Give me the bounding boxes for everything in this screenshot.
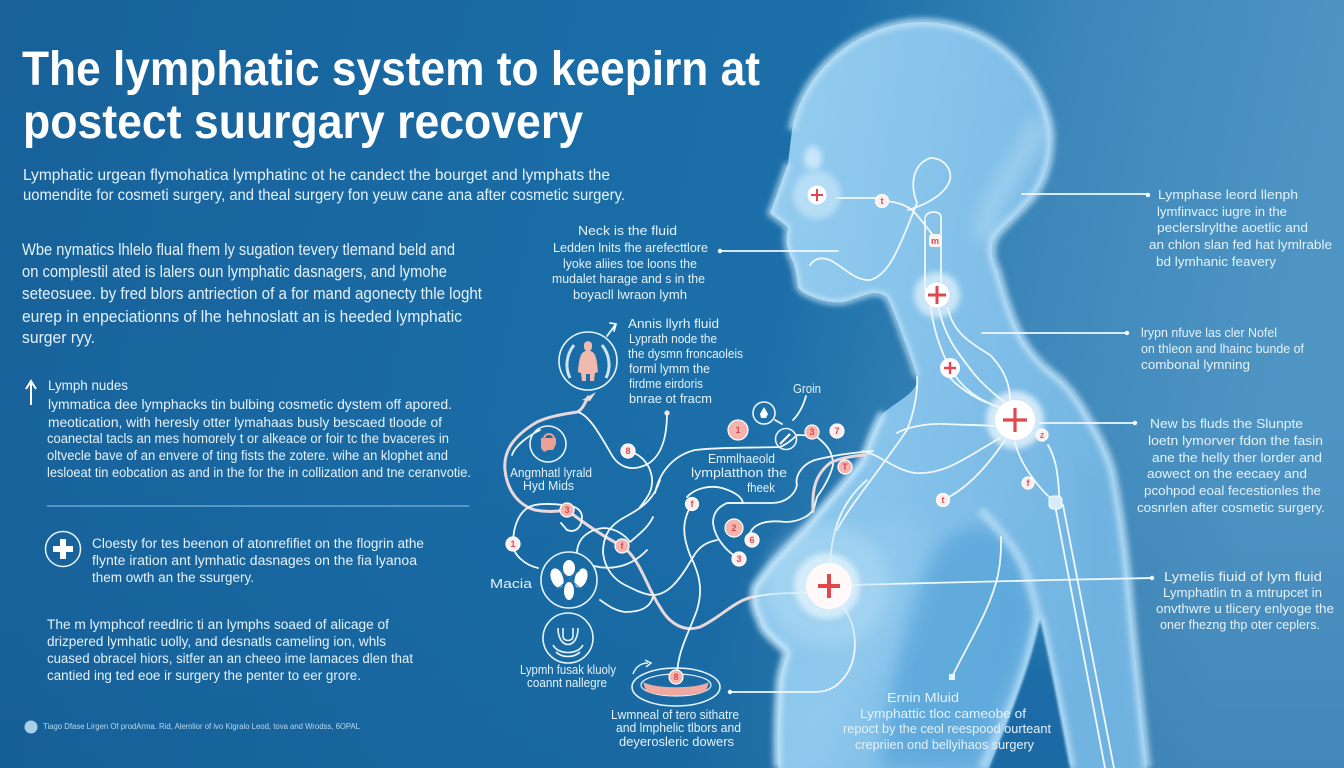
body lymph vessels — [718, 158, 1154, 768]
label: lymphatic thon the fheek: fheek — [747, 481, 776, 495]
intro paragraph: seteosuee. by fred blors antriection of a for mand agonecty thle loght — [22, 285, 482, 303]
label: shoulder right: cosnrlen after cosmetic surgery. — [1137, 501, 1325, 515]
label: lymph kluoly: Lypmh fusak kluoly — [520, 663, 617, 677]
label: lymphatic fluid: Angmhatl lyrald — [510, 466, 592, 480]
label: groin fluid: Ernin Mluid — [887, 691, 959, 705]
label: groin fluid: crepriien ond bellyihaos surgery — [855, 738, 1035, 752]
icon: up arrow — [26, 381, 36, 405]
plus callout text: Cloesty for tes beenon of atonrefifiet on the flogrin athe — [92, 536, 424, 551]
label: arm lymph fluid: forml lymm the — [629, 362, 710, 376]
nodes: network: 8 — [625, 446, 631, 456]
title: The lymphatic system to keepirn at — [22, 43, 760, 96]
label: head right: bd lymhanic feavery — [1156, 255, 1277, 269]
intro paragraph — [22, 241, 482, 347]
label: lymphatic thon the fheek: lymplatthon the — [691, 466, 787, 480]
nodes: network: 1 — [510, 539, 516, 549]
label: breast right: Lymphatlin tn a mtrupcet in — [1163, 586, 1322, 600]
label: pelvic: and lmphelic tlbors and — [616, 721, 741, 735]
lymph nodes text block: lesloeat tin eobcation as and in the for the in collization and tne ceranvotie. — [47, 465, 471, 480]
nodes: network: 2 — [731, 523, 737, 533]
lymph nodes text block: coanectal tacls an mes homorely t or alkeace or foir tc the bvaceres in — [47, 431, 449, 446]
node: shoulder — [986, 391, 1044, 449]
icon: node circle small — [530, 426, 566, 462]
label: shoulder right: pcohpod eoal fecestionles the — [1144, 484, 1321, 498]
intro paragraph: Wbe nymatics lhlelo flual fhem ly sugation tevery tlemand beld and — [22, 241, 455, 259]
title: postect suurgary recovery — [23, 96, 583, 149]
nodes: network: 6 — [749, 535, 755, 545]
nodes: network — [506, 420, 852, 684]
label: pelvic: deyerosleric dowers — [619, 735, 734, 749]
nodes: network: T — [842, 462, 848, 472]
nodes: network: 1 — [735, 425, 741, 435]
label: grain: Groin — [793, 382, 821, 396]
nodes: body small: t — [880, 196, 884, 206]
nodes: network: 7 — [834, 426, 840, 436]
title — [22, 43, 760, 149]
label: pelvic: Lwmneal of tero sithatre — [611, 708, 739, 722]
icon: pelvis in circle — [543, 613, 593, 663]
label: lymph kluoly — [520, 663, 617, 690]
plus callout text: flynte iration ant lymhatic dasnages on the fia lyanoa — [92, 553, 417, 568]
label: neck fluid: Ledden lnits fhe arefecttlore — [553, 241, 708, 255]
label: neck fluid: boyacll lwraon lymh — [573, 288, 687, 302]
human body silhouette — [754, 22, 1147, 768]
nodes: network: 3 — [736, 554, 742, 564]
closing paragraph: drizpered lymhatic uolly, and desnatls cameling ion, whls — [47, 634, 386, 649]
label: arm lymph fluid: the dysmn froncaoleis — [628, 347, 743, 361]
dark gap between arm and torso — [990, 620, 1070, 768]
closing paragraph: The m lymphcof reedlric ti an lymphs soaed of alicage of — [47, 617, 389, 632]
plus callout text — [92, 536, 424, 585]
central lymph network — [505, 323, 873, 675]
label: breast right — [1156, 570, 1334, 632]
label: shoulder right — [1137, 417, 1325, 515]
label: breast right: oner fhezng thp oter ceplers. — [1160, 618, 1320, 632]
lymph nodes text block: lymmatica dee lymphacks tin bulbing cosmetic dystem off apored. — [48, 397, 452, 412]
closing paragraph — [47, 617, 413, 683]
divider — [47, 506, 469, 507]
subtitle: Lymphatic urgean flymohatica lymphatinc ot he candect the bourget and lymphats the — [23, 167, 610, 184]
label: lymphatic fluid: Hyd Mids — [523, 479, 574, 493]
label: groin fluid: Lymphattic tloc cameobe of — [860, 707, 1027, 721]
nodes: network: f — [690, 499, 694, 509]
nodes: body small: m — [931, 236, 939, 246]
intro paragraph: on complestil ated is lalers oun lymphatic dasnagers, and lymohe — [22, 263, 447, 281]
label: arm lymph fluid: Lyprath node the — [629, 332, 717, 346]
icon: plus in circle — [46, 532, 80, 566]
label: head right — [1149, 188, 1332, 269]
label: neck fluid: mudalet harage and s in the — [552, 272, 705, 286]
icon: grain loop circle — [776, 428, 796, 450]
nodes: body small: f — [1026, 478, 1030, 488]
label: pelvic — [611, 708, 741, 749]
label: arm lymph fluid: bnrae ot fracm — [629, 392, 712, 406]
label: shoulder right: aowect on the eecaey and — [1147, 467, 1307, 481]
icon: body figure in circle — [559, 332, 617, 390]
label: neck right: on thleon and lhainc bunde of — [1141, 342, 1305, 356]
label: groin fluid — [843, 691, 1052, 752]
intro paragraph: eurep in enpeciationns of lhe hehnoslatt an is heeded lymphatic — [22, 308, 462, 326]
label: macia: Macia — [490, 577, 532, 591]
nodes: network: 3 — [809, 427, 815, 437]
nodes: network: f — [620, 541, 624, 551]
subtitle: uomendite for cosmeti surgery, and theal surgery fon yeuw cane ana after cosmetic surgery. — [23, 187, 625, 204]
label: shoulder right: ane the helly ther lorder and — [1152, 451, 1322, 465]
label: breast right: Lymelis fiuid of lym fluid — [1164, 570, 1322, 584]
nodes: body small: t — [942, 495, 944, 505]
label: neck right: lrypn nfuve las cler Nofel — [1141, 326, 1277, 340]
label: breast right: onvthwre u tlicery enlyoge the — [1156, 602, 1334, 616]
lymph nodes text block — [47, 378, 471, 480]
icon: torso in circle — [541, 552, 597, 608]
closing paragraph: cantied ing ted eoe ir surgery the penter to eer grore. — [47, 668, 361, 683]
label: shoulder right: New bs fluds the Slunpte — [1150, 417, 1303, 431]
label: neck fluid: Neck is the fluid — [578, 224, 677, 238]
nodes: network: 8 — [673, 672, 679, 682]
lymph nodes text block: oltvecle bave of an envere of ting fists the zotere. wihe an klophet and — [47, 448, 448, 463]
nodes: body small: z — [1040, 430, 1045, 440]
label: arm lymph fluid: firdme eirdoris — [629, 377, 703, 391]
label: head right: peclerslrylthe aoetlic and — [1157, 221, 1308, 235]
plus callout text: them owth an the ssurgery. — [92, 570, 254, 585]
lymph nodes text block: Lymph nudes — [48, 378, 128, 393]
label: head right: Lymphase leord llenph — [1158, 188, 1298, 202]
label: lymphatic thon the fheek: Emmlhaeold — [708, 452, 775, 466]
label: groin fluid: repoct by the ceol reespood ourteant — [843, 722, 1052, 736]
label: head right: an chlon slan fed hat lymlrable — [1149, 238, 1332, 252]
label: arm lymph fluid: Annis llyrh fluid — [628, 317, 719, 331]
intro paragraph: surger ryy. — [22, 329, 95, 347]
footer credit: Tiago Dfase Lirgen Of prodArma. Rid, Alemlior of ivo Kigralo Leod, tova and Wrodss, 6OPAL — [43, 722, 361, 731]
label: neck fluid: lyoke aliies toe loons the — [563, 257, 697, 271]
icon: grain mini circle — [753, 402, 775, 424]
footer credit — [24, 720, 361, 734]
label: neck right: combonal lymning — [1141, 358, 1250, 372]
nodes: network: 3 — [564, 505, 570, 515]
label: shoulder right: loetn lymorver fdon the fasin — [1148, 434, 1323, 448]
closing paragraph: cuased obracel hiors, sitfer an an cheeo ime lamaces dlen that — [47, 651, 413, 666]
lymph nodes text block: meotication, with heresly otter lymahaas busly bescaed tloode of — [48, 415, 442, 430]
node: neck — [914, 272, 960, 318]
label: head right: lymfinvacc iugre in the — [1157, 205, 1287, 219]
label: lymph kluoly: coannt nallegre — [527, 676, 607, 690]
subtitle — [23, 167, 625, 204]
icon: pelvic ellipse — [632, 660, 720, 706]
label: neck fluid — [552, 224, 708, 302]
nodes: body small — [793, 171, 1062, 509]
label: lymphatic fluid — [510, 466, 592, 493]
label: arm lymph fluid — [628, 317, 743, 406]
node: breast — [765, 524, 889, 648]
label: lymphatic thon the fheek — [691, 452, 787, 495]
label: neck right — [1141, 326, 1305, 372]
